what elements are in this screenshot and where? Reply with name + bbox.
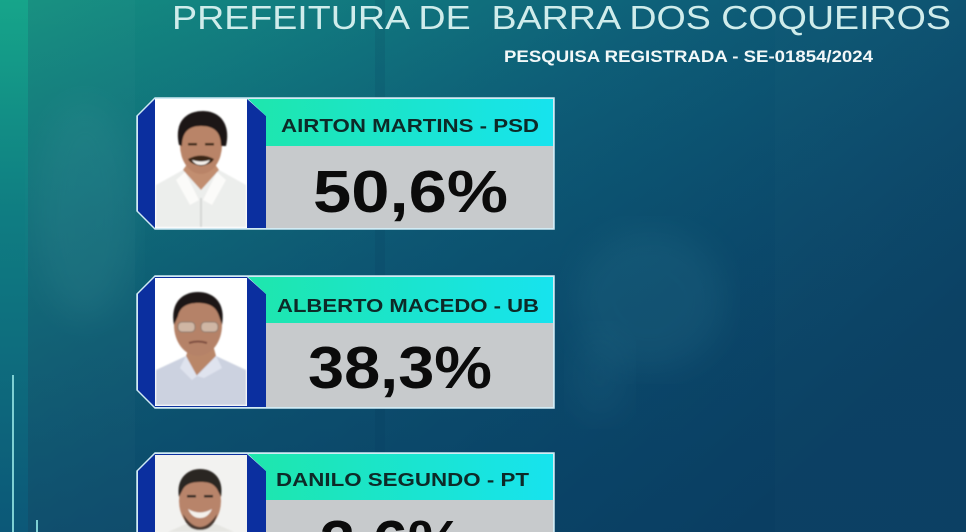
percentage: 38,3%	[308, 335, 492, 401]
blue side band	[138, 454, 266, 532]
blue side band	[138, 277, 266, 407]
value background	[266, 146, 553, 228]
panel: Airton Martins	[137, 98, 554, 229]
percentage: 50,6%	[313, 159, 508, 225]
candidate photo	[155, 278, 247, 406]
title: PREFEITURA DE BARRA DOS COQUEIROS	[172, 0, 951, 36]
blue side band	[138, 99, 266, 228]
subtitle: survey registration: PESQUISA REGISTRADA - SE-01854/2024	[504, 48, 874, 66]
card frame	[137, 98, 554, 229]
value background	[266, 323, 553, 407]
candidate photo	[155, 455, 247, 532]
candidate name: DANILO SEGUNDO - PT	[276, 469, 530, 490]
panel: Danilo Segundo	[137, 453, 554, 532]
accent lines	[12, 375, 38, 532]
candidate name: ALBERTO MACEDO - UB	[277, 295, 539, 316]
value background	[266, 500, 553, 532]
card frame	[137, 453, 554, 532]
panel: Alberto Macedo	[137, 276, 554, 408]
card frame	[137, 276, 554, 408]
header band	[248, 454, 553, 500]
candidate name: AIRTON MARTINS - PSD	[281, 115, 539, 136]
header band	[248, 99, 553, 146]
candidate photo	[155, 99, 247, 228]
header band	[248, 277, 553, 323]
